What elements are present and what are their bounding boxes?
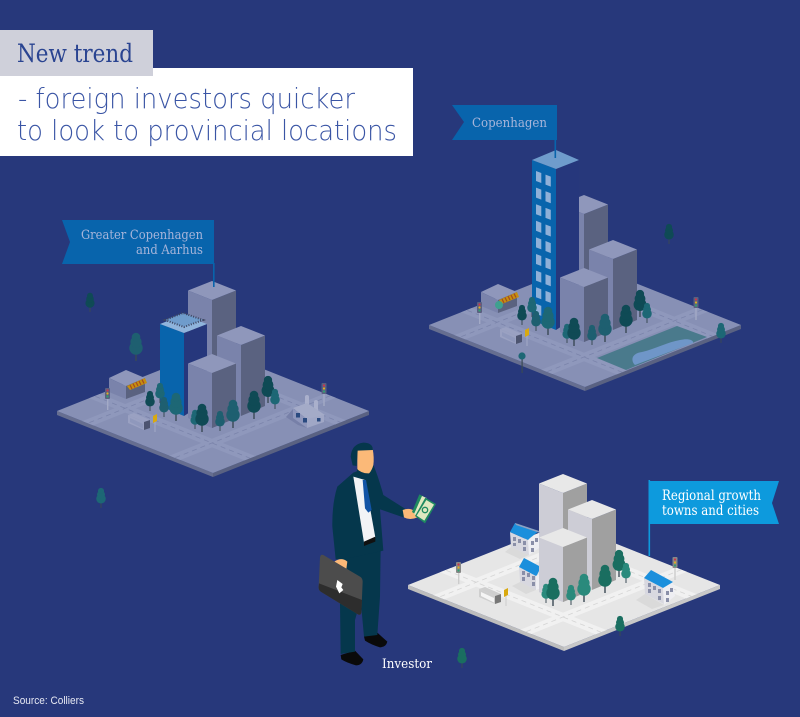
- building: back grey: [188, 281, 236, 428]
- subtitle line 1: - foreign investors quicker: [18, 82, 355, 115]
- flag: Regional growth towns and cities: [649, 481, 779, 524]
- trees: Greater Copenhagen: [145, 376, 280, 432]
- flag label: Regional growth: Regional growth: [662, 488, 761, 504]
- trousers: [340, 547, 381, 654]
- briefcase: [319, 555, 363, 615]
- building: blue tower: [532, 150, 579, 330]
- flag label: towns and cities: towns and cities: [662, 503, 759, 519]
- banknotes: [412, 494, 436, 523]
- left hand: [334, 559, 347, 572]
- tree: upper left: [85, 293, 95, 312]
- right hand: [403, 509, 417, 519]
- building: back grey: [560, 195, 608, 342]
- flag: Copenhagen: [452, 105, 557, 158]
- buildings: regional: [539, 500, 631, 606]
- tree: front edge: [615, 616, 625, 636]
- flag label: and Aarhus: and Aarhus: [136, 243, 203, 258]
- flag: Greater Copenhagen and Aarhus: [62, 220, 215, 287]
- buildings: Copenhagen: [495, 150, 652, 346]
- house: upper: [505, 523, 540, 559]
- figure: investor: [319, 443, 436, 665]
- flag label: Greater Copenhagen: Greater Copenhagen: [81, 228, 204, 243]
- flag pole: regional: [648, 480, 650, 556]
- tree: below platform: [96, 488, 106, 508]
- house: middle: [512, 558, 541, 594]
- belt: [364, 537, 375, 546]
- subtitle box: [0, 68, 413, 156]
- face: [357, 449, 374, 477]
- source note: Source: Colliers: [13, 695, 84, 707]
- trees: Copenhagen: [517, 290, 652, 346]
- round tree: front edge: [518, 352, 526, 373]
- title block: [0, 30, 413, 156]
- building: back white: [539, 474, 587, 602]
- flag label: Copenhagen: Copenhagen: [472, 116, 548, 131]
- jacket: [332, 465, 406, 559]
- platform: Copenhagen: [429, 263, 741, 391]
- tree: off platform: [664, 224, 674, 244]
- title tab: [0, 30, 153, 76]
- subtitle line 2: to look to provincial locations: [17, 114, 397, 147]
- title: New trend: [17, 39, 133, 68]
- hair and beard: [351, 443, 373, 477]
- house: right: [636, 570, 675, 609]
- tree: right edge: [716, 323, 726, 343]
- street furniture: Copenhagen: [477, 284, 698, 346]
- panel: Regional growth towns and cities block: [408, 474, 720, 668]
- park with pond: [597, 326, 707, 370]
- factory: [286, 395, 325, 428]
- tie: [363, 480, 372, 513]
- street furniture: regional: [456, 557, 678, 606]
- panel: Greater Copenhagen and Aarhus city block: [57, 281, 369, 508]
- shirt: [353, 477, 375, 543]
- green marker: [495, 301, 503, 309]
- platform: Greater Copenhagen: [57, 349, 369, 477]
- tree: large off platform: [129, 333, 143, 361]
- trees: regional: [541, 550, 631, 606]
- building: blue block with roof terrace: [160, 313, 207, 416]
- platform: regional: [408, 523, 720, 651]
- buildings: Greater Copenhagen: [145, 281, 280, 432]
- panel: Copenhagen city block: [429, 150, 741, 391]
- label: Investor: Investor: [382, 657, 433, 672]
- shoes: [341, 633, 387, 665]
- tree: below platform: [457, 648, 467, 668]
- street furniture: Greater Copenhagen: [105, 370, 326, 432]
